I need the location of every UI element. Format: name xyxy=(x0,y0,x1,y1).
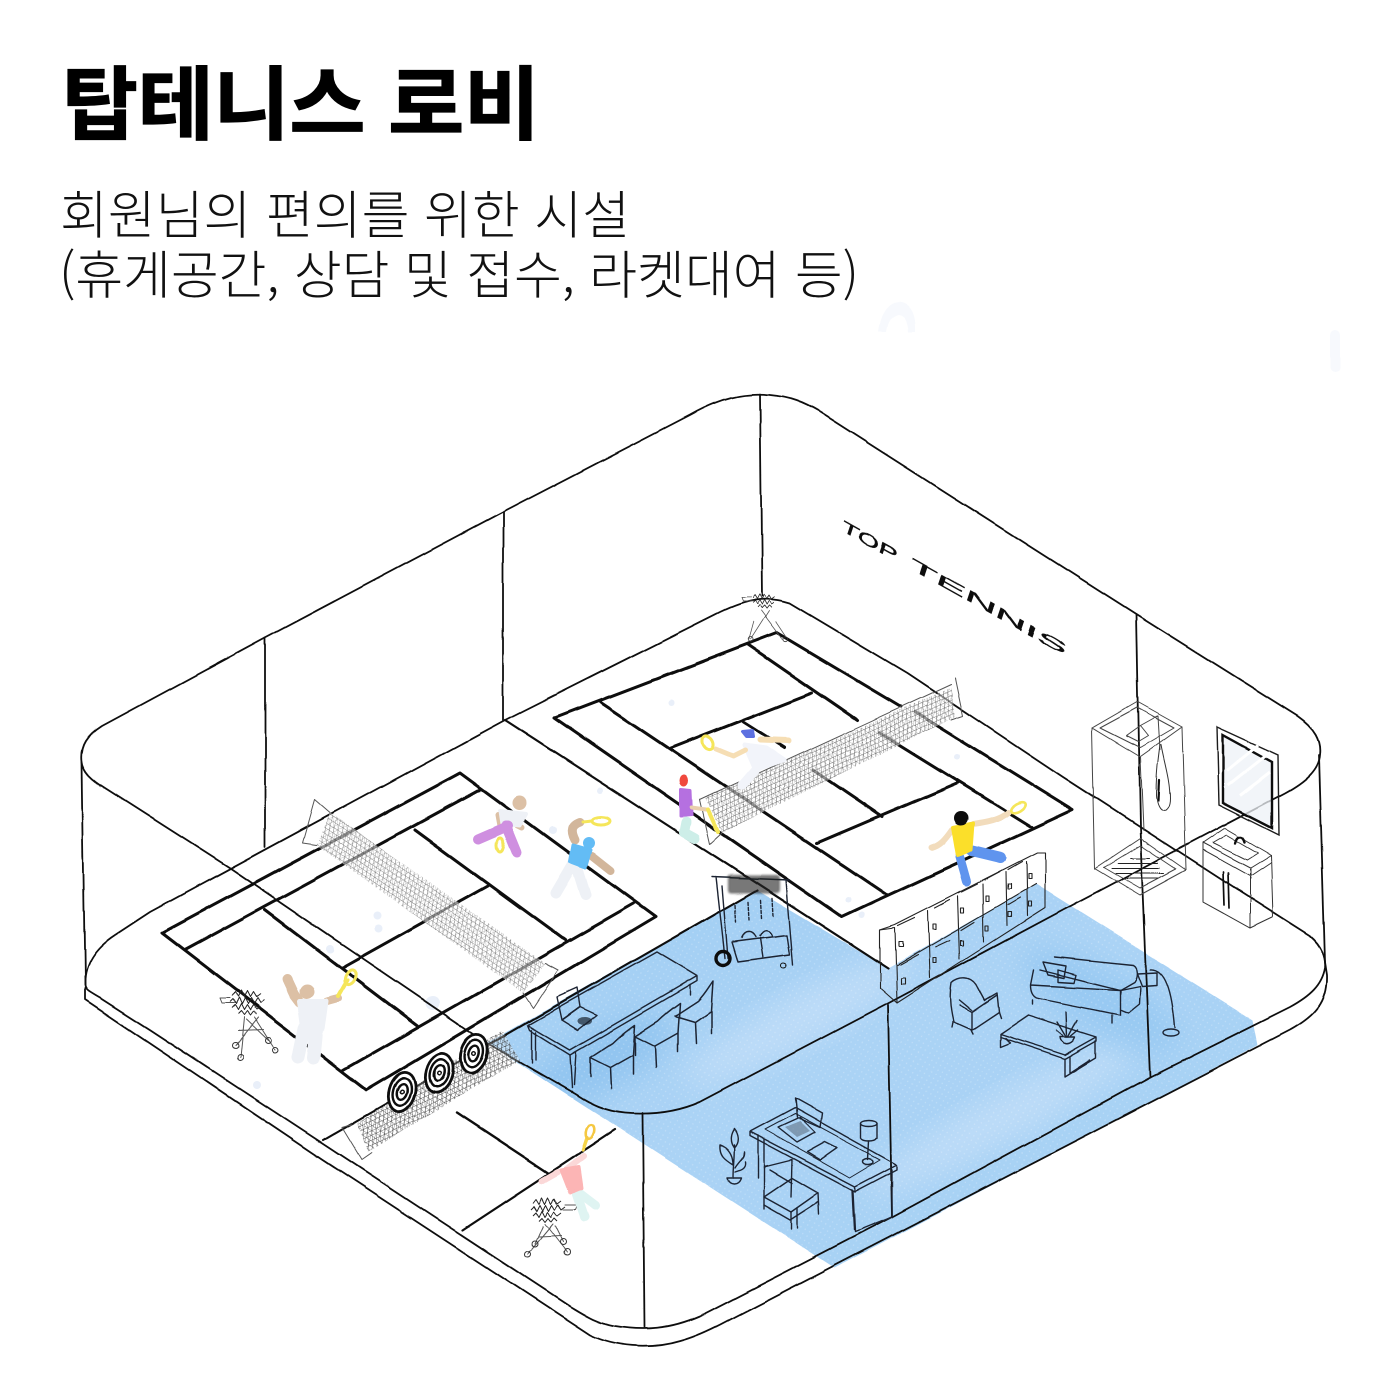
faint background marks xyxy=(253,302,1340,1089)
laptop on desk xyxy=(778,1098,822,1143)
tennis court: left xyxy=(162,773,656,1090)
table plant xyxy=(1057,1012,1079,1044)
net: left court xyxy=(303,800,558,1008)
net: upper court xyxy=(700,678,963,844)
desk lamp xyxy=(861,1120,877,1165)
armchair xyxy=(951,977,1001,1034)
wall logo: TOP TENNIS xyxy=(839,517,1069,659)
desk chair xyxy=(764,1160,819,1229)
player: blue cap xyxy=(700,731,788,785)
room outline: walls and floor xyxy=(82,394,1327,1346)
player: purple pants xyxy=(478,796,527,853)
net: lower court xyxy=(342,1030,520,1160)
potted plant xyxy=(720,1129,745,1184)
coffee table xyxy=(1000,1015,1097,1077)
work desk xyxy=(750,1108,897,1232)
player: yellow shirt xyxy=(931,800,1027,882)
ball machine trolley xyxy=(712,875,793,968)
illustration xyxy=(82,302,1340,1346)
ball cart: lower xyxy=(525,1198,577,1257)
targets on the wall xyxy=(384,1031,492,1115)
mirror xyxy=(1217,727,1279,835)
player: blue shirt xyxy=(556,817,611,895)
court divider line xyxy=(505,720,888,968)
blue lobby floor xyxy=(480,880,1270,1280)
reception counter xyxy=(528,952,697,1088)
notebook xyxy=(807,1142,837,1160)
floor edge xyxy=(85,599,1325,1329)
tennis court: upper right xyxy=(554,633,1073,917)
ball cart: top xyxy=(741,594,788,642)
wall top rim xyxy=(82,394,1320,1114)
sofa xyxy=(1030,957,1140,1023)
lockers xyxy=(880,853,1045,1003)
wall vertical posts xyxy=(82,394,1325,1327)
wall logo: TOP TENNIS: TENNIS xyxy=(908,555,1069,659)
player: pink shirt xyxy=(542,1124,596,1217)
ball cart: left xyxy=(220,991,278,1060)
subtitle text: 회원님의 편의를 위한 시설 xyxy=(60,174,630,249)
subtitle text: (휴게공간, 상담 및 접수, 라켓대여 등) xyxy=(59,234,859,309)
laptop on counter xyxy=(557,988,597,1030)
subtitle text xyxy=(59,174,859,309)
player: red head, purple top xyxy=(680,775,718,838)
counter chairs xyxy=(590,981,713,1089)
lower court boundary xyxy=(323,890,757,1140)
title: 탑테니스 로비 xyxy=(62,61,540,150)
shower booth xyxy=(1092,702,1186,895)
wall logo: TOP TENNIS: TOP xyxy=(839,517,900,565)
floor lower edge xyxy=(85,962,1327,1346)
floor lamp xyxy=(1137,969,1179,1036)
player: white shirt, bottom-left court xyxy=(287,968,358,1058)
sink cabinet xyxy=(1203,828,1273,928)
tennis court: lower xyxy=(457,1113,615,1230)
